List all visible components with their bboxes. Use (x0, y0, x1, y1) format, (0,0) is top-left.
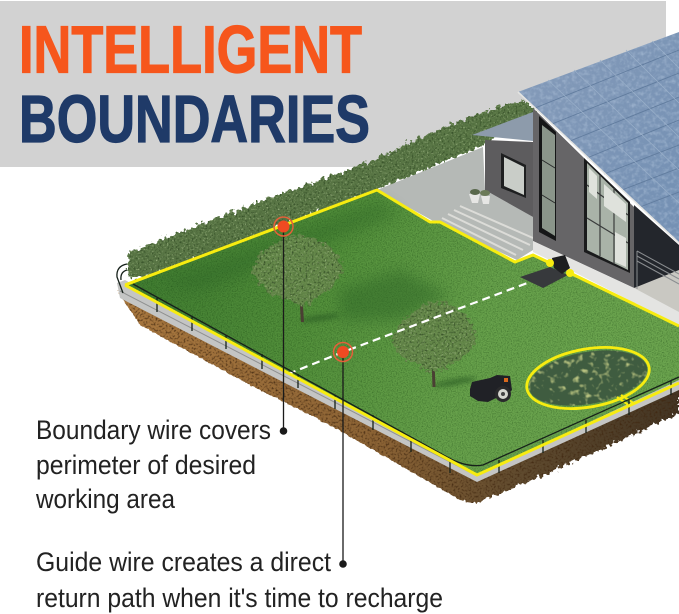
header panel (0, 1, 666, 167)
tree 2 (392, 302, 476, 387)
tree shadows (300, 312, 477, 389)
text: guide wire description: return path when it's time to recharge (36, 583, 443, 613)
lawn shadows (160, 200, 450, 320)
boundary wire around flower bed (522, 339, 654, 417)
robotic mower (470, 375, 512, 402)
house: side wing (472, 112, 533, 217)
lawn (125, 190, 679, 475)
patio (377, 147, 533, 260)
boundary wire (125, 190, 679, 475)
text: boundary wire description: working area (35, 484, 176, 514)
title: BOUNDARIES (19, 83, 370, 157)
planters (469, 189, 490, 204)
leader end dots (280, 427, 347, 568)
stone rim (117, 280, 679, 482)
roof (518, 32, 679, 243)
marker: guide wire (334, 342, 352, 362)
tree 1 (252, 235, 343, 322)
tall window (539, 116, 556, 241)
wire connection points (546, 259, 574, 277)
marker: boundary wire (274, 217, 293, 236)
guide wire (288, 282, 530, 374)
soil base (118, 288, 679, 503)
house: main wall (533, 108, 634, 288)
text: boundary wire description: perimeter of desired (36, 450, 256, 480)
dark recessed wall (634, 205, 679, 288)
leader lines (284, 226, 343, 564)
text: guide wire description: Guide wire creates a direct (36, 547, 331, 577)
terrace and white plinth (533, 241, 679, 326)
hedge (128, 100, 536, 279)
large window (584, 158, 630, 273)
charging station (520, 255, 570, 288)
fence (117, 264, 679, 473)
text: boundary wire description: Boundary wire covers (36, 415, 271, 445)
title: INTELLIGENT (19, 14, 362, 88)
text: boundary wire description (35, 415, 271, 514)
title (19, 14, 370, 157)
flower bed (524, 342, 652, 414)
text: guide wire description (36, 547, 443, 613)
patio steps (442, 206, 533, 255)
